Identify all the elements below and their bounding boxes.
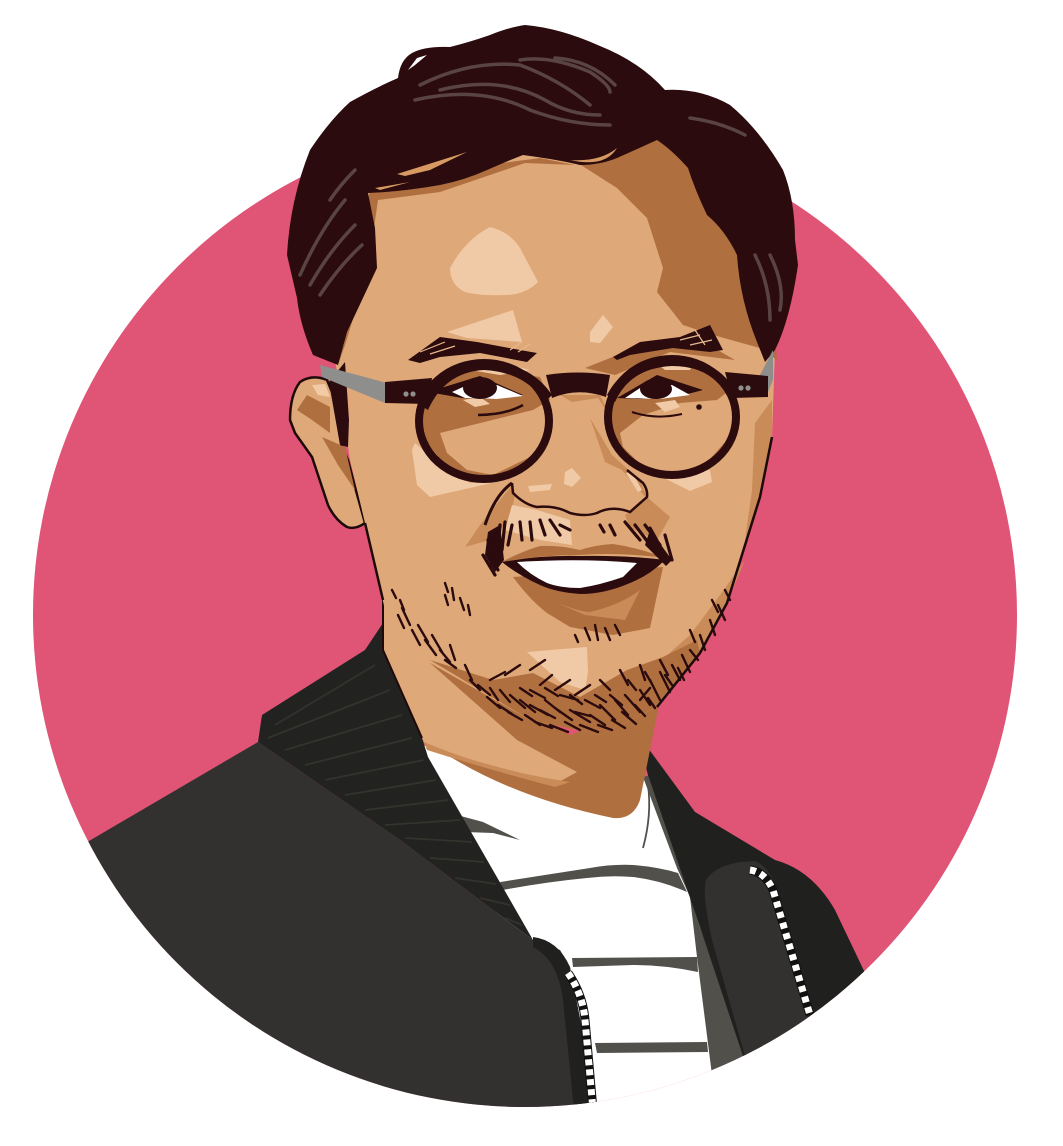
upper lip highlight — [505, 505, 572, 545]
nose bridge shading — [560, 395, 648, 500]
nose outline — [512, 470, 647, 515]
nose highlights — [528, 468, 642, 492]
right eye — [617, 375, 703, 417]
right cheek shading — [745, 400, 772, 540]
hair curl gap — [408, 55, 427, 70]
inner placket — [643, 775, 748, 1075]
nose — [512, 400, 647, 513]
left zipper — [568, 973, 593, 1110]
right jacket — [640, 745, 866, 1062]
teeth — [517, 560, 637, 588]
right eyebrow — [613, 325, 723, 360]
left eye — [428, 376, 523, 415]
hair sliver highlights — [375, 148, 617, 190]
mustache — [483, 520, 672, 575]
jaw beard shadow — [430, 640, 700, 735]
forehead shadow — [573, 130, 777, 360]
mouth — [502, 556, 665, 594]
chin highlight — [527, 647, 588, 690]
nose crease — [485, 483, 512, 525]
face outline — [365, 437, 772, 707]
shirt — [418, 745, 735, 1120]
forehead highlight — [450, 227, 538, 295]
face — [335, 130, 777, 735]
right lens shadow — [610, 362, 730, 477]
left jacket body — [88, 742, 587, 1107]
jaw edge shading — [665, 560, 745, 657]
hairline shadow — [338, 158, 575, 365]
hair sheen — [300, 58, 781, 320]
left eyebrow — [408, 337, 537, 363]
upper lip — [502, 544, 665, 562]
right hinge — [725, 372, 768, 398]
ear — [290, 377, 365, 528]
jacket front edge — [533, 937, 598, 1110]
brow shadow — [585, 340, 735, 375]
forehead spot — [590, 315, 613, 343]
pink circle background — [33, 123, 1017, 1107]
right lens — [608, 359, 736, 475]
left temple arm — [320, 365, 387, 403]
hair — [287, 25, 798, 365]
chin shadow — [513, 567, 663, 635]
cheek crease shading — [465, 485, 670, 547]
left lens — [419, 363, 549, 479]
brow highlight — [447, 310, 522, 342]
glasses — [320, 350, 773, 479]
neck — [383, 600, 660, 818]
under-eye highlights — [463, 360, 695, 412]
ear-side hair — [329, 362, 349, 447]
cheek highlights — [412, 443, 505, 497]
right jacket lapel — [705, 861, 808, 1056]
clothing — [88, 624, 864, 1107]
left ribbed collar — [258, 620, 533, 940]
right temple arm — [760, 350, 773, 392]
right zipper — [750, 870, 810, 1015]
left lens shadow — [420, 367, 550, 478]
left hinge — [385, 378, 432, 404]
face base — [335, 130, 775, 735]
beard and stubble — [392, 583, 730, 732]
bridge — [546, 372, 610, 398]
